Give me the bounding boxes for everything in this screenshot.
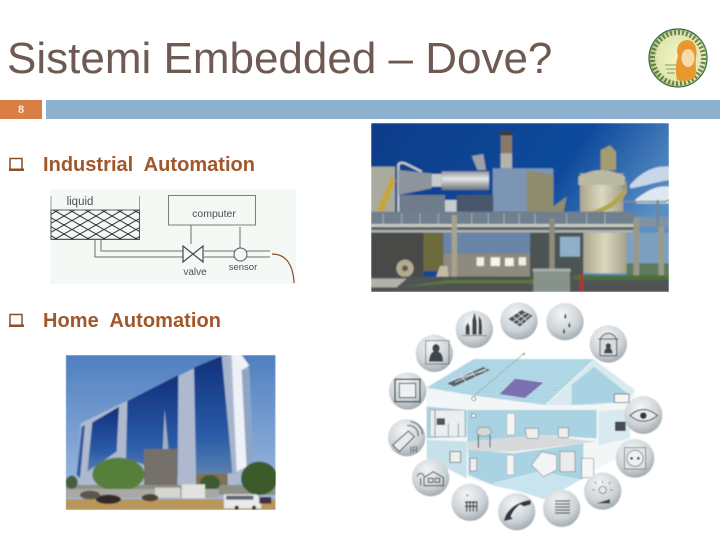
slide number tab — [0, 100, 42, 119]
icon: person window — [416, 335, 453, 372]
photo: industrial plant — [371, 123, 669, 292]
house — [427, 351, 635, 500]
process diagram: liquid, computer, valve, sensor — [50, 189, 296, 284]
bullet: Industrial Automation: Industrial Automation — [43, 154, 255, 176]
icon: blinds — [543, 490, 580, 527]
university seal logo — [649, 29, 707, 87]
icon: radiator: * — [466, 492, 469, 501]
process diagram: liquid, computer, valve, sensor: liquid — [67, 196, 93, 208]
icon: house and tree — [412, 459, 449, 496]
process diagram: liquid, computer, valve, sensor: sensor — [229, 262, 257, 273]
house: × — [523, 351, 526, 356]
home automation illustration — [388, 302, 662, 530]
bullet: Home Automation: Home Automation — [43, 310, 221, 332]
slide number tab: 8 — [18, 104, 24, 116]
icon: solar panel — [500, 302, 538, 340]
icon: IR remote — [388, 419, 425, 456]
icon: flames / heating — [456, 311, 493, 348]
process diagram: liquid, computer, valve, sensor: computer — [192, 208, 236, 220]
icon: water drops — [546, 303, 584, 340]
icon: radiator — [451, 484, 489, 521]
icon: light bulb — [584, 472, 621, 510]
title: Sistemi Embedded – Dove? — [7, 34, 552, 83]
icon: wall socket — [616, 439, 654, 478]
icon: garage door — [389, 372, 426, 410]
photo: glass office building — [66, 355, 278, 510]
icon: telephone — [498, 493, 535, 530]
header bar — [46, 100, 720, 119]
icon: IR remote: IR — [410, 444, 418, 454]
process diagram: liquid, computer, valve, sensor: valve — [183, 267, 207, 278]
liquid tank — [51, 210, 140, 240]
icon: door security — [590, 325, 627, 363]
icon: eye — [624, 396, 662, 434]
